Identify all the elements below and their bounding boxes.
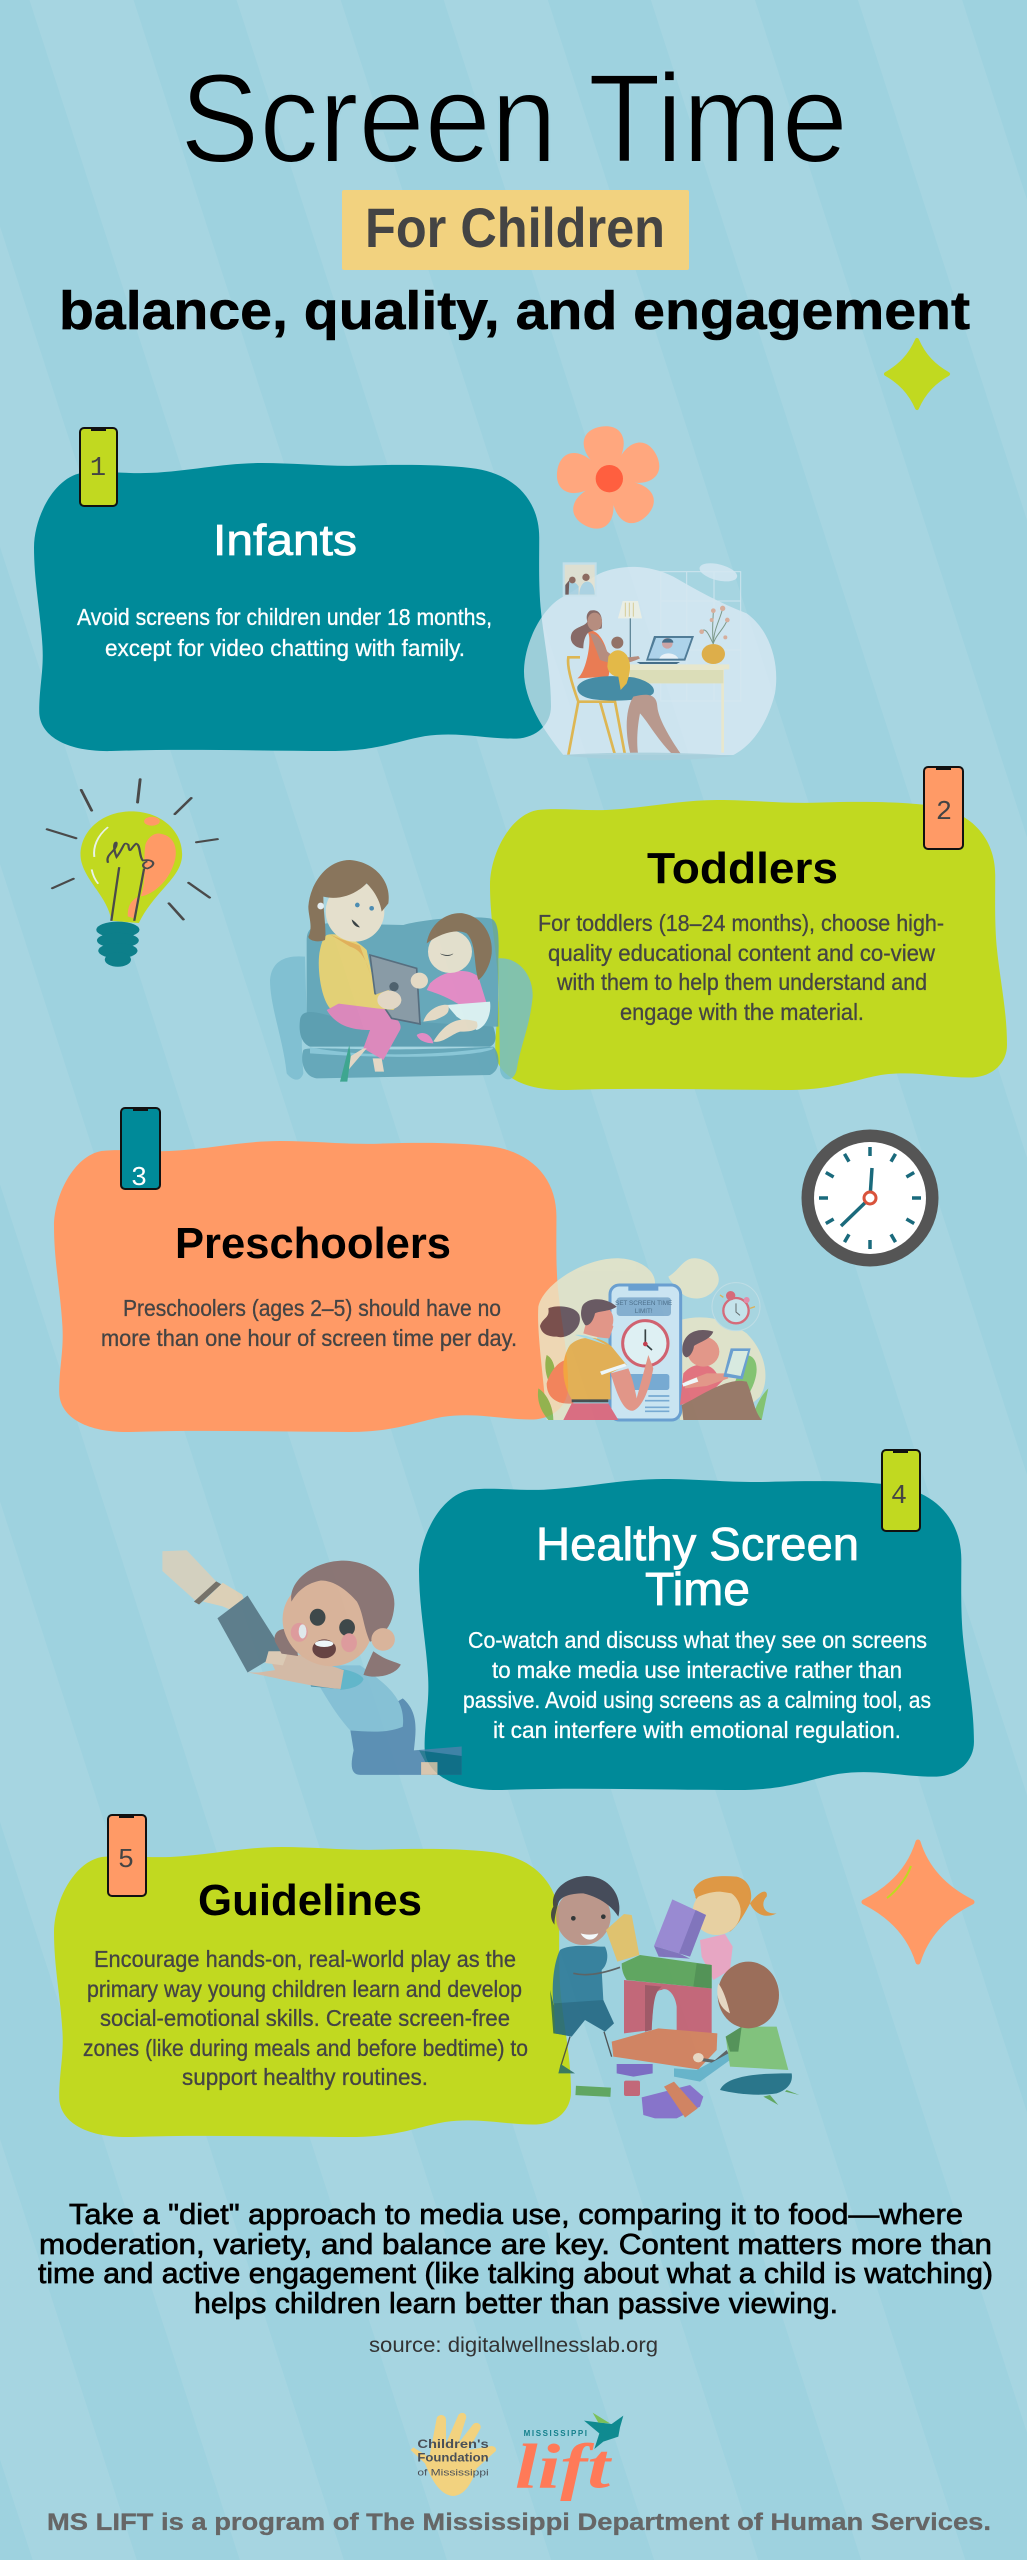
heading: Toddlers	[647, 844, 838, 893]
body text: Co-watch and discuss what they see on screens	[468, 1627, 927, 1653]
illustration: mother and toddler on sofa with tablet	[270, 860, 533, 1083]
icon: green sparkle	[886, 340, 948, 408]
title: Screen Time	[180, 48, 848, 189]
tagline: balance, quality, and engagement	[59, 281, 970, 341]
closing text: time and active engagement (like talking about what a child is watching)	[38, 2258, 993, 2290]
body text: passive. Avoid using screens as a calming tool, as	[463, 1687, 931, 1713]
closing text: moderation, variety, and balance are key. Content matters more than	[39, 2229, 992, 2261]
icon: wall clock	[802, 1130, 938, 1266]
body text: For toddlers (18–24 months), choose high-	[538, 910, 944, 936]
heading: Time	[645, 1563, 750, 1615]
icon: phone number 2: 2	[936, 798, 952, 828]
heading: Guidelines	[198, 1876, 422, 1925]
body text: social-emotional skills. Create screen-free	[100, 2005, 510, 2031]
body text	[77, 604, 492, 661]
illustration: woman setting screen time limit on phone with boy	[538, 1258, 768, 1420]
heading: Healthy Screen	[536, 1518, 859, 1570]
closing text	[38, 2199, 993, 2320]
closing text: helps children learn better than passive viewing.	[194, 2288, 838, 2320]
body text	[83, 1946, 528, 2090]
body text: quality educational content and co-view	[548, 940, 935, 966]
icon: phone number 5: 5	[118, 1846, 134, 1876]
illustration: woman setting screen time limit on phone with boy: LIMIT!	[635, 1308, 653, 1315]
icon: light bulb	[47, 779, 217, 967]
logo: Children's Foundation of Mississippi: Children's	[417, 2438, 489, 2451]
icon: phone number 3	[121, 1108, 160, 1194]
icon: phone number 5	[108, 1815, 146, 1896]
logo: Mississippi Lift: MISSISSIPPI	[524, 2429, 587, 2438]
icon: phone number 3: 3	[131, 1164, 147, 1194]
body text: it can interfere with emotional regulation.	[493, 1717, 901, 1743]
icon: phone number 4: 4	[891, 1482, 907, 1512]
panel: healthy screen time	[419, 1450, 974, 1790]
heading: Infants	[213, 516, 357, 565]
body text: to make media use interactive rather than	[492, 1657, 902, 1683]
footer note: MS LIFT is a program of The Mississippi Department of Human Services.	[47, 2509, 991, 2536]
body text	[463, 1627, 931, 1743]
panel: guidelines	[54, 1815, 571, 2137]
icon: phone number 4	[882, 1450, 920, 1531]
icon: phone number 1: 1	[90, 454, 106, 484]
logo: Children's Foundation of Mississippi	[411, 2413, 496, 2496]
subtitle badge: For Children: For Children	[365, 196, 665, 259]
logo: Children's Foundation of Mississippi: Foundation	[417, 2451, 489, 2464]
icon: phone number 2	[924, 767, 963, 849]
body text: Encourage hands-on, real-world play as the	[94, 1946, 516, 1972]
heading: Preschoolers	[175, 1219, 451, 1268]
body text: Avoid screens for children under 18 months,	[77, 604, 492, 630]
logo: Mississippi Lift: lift	[515, 2431, 613, 2501]
icon: phone number 1	[80, 428, 117, 506]
panel: toddlers	[490, 767, 1007, 1090]
illustration: woman setting screen time limit on phone with boy: SET SCREEN TIME	[615, 1300, 672, 1307]
body text	[101, 1295, 517, 1351]
body text	[538, 910, 944, 1025]
closing text: Take a "diet" approach to media use, comparing it to food—where	[69, 2199, 963, 2231]
icon: flower	[554, 424, 665, 535]
body text: more than one hour of screen time per day.	[101, 1325, 517, 1351]
source: source: digitalwellnesslab.org	[369, 2334, 658, 2357]
body text: Preschoolers (ages 2–5) should have no	[123, 1295, 501, 1321]
illustration: children building with blocks	[550, 1876, 799, 2118]
body text: primary way young children learn and develop	[87, 1976, 522, 2002]
logo: Children's Foundation of Mississippi: of Mississippi	[417, 2467, 489, 2477]
body text: engage with the material.	[620, 999, 864, 1025]
panel: preschoolers	[54, 1108, 568, 1432]
heading	[536, 1518, 859, 1615]
panel: infants	[34, 428, 551, 751]
body text: except for video chatting with family.	[105, 635, 465, 661]
icon: orange sparkle	[864, 1842, 972, 1962]
illustration: mother and baby video chatting at desk	[524, 560, 776, 760]
body text: with them to help them understand and	[556, 969, 927, 995]
illustration: upset girl holding onto tablet	[162, 1550, 462, 1775]
body text: support healthy routines.	[182, 2064, 428, 2090]
body text: zones (like during meals and before bedtime) to	[83, 2035, 528, 2061]
logo: Mississippi Lift	[515, 2413, 623, 2501]
